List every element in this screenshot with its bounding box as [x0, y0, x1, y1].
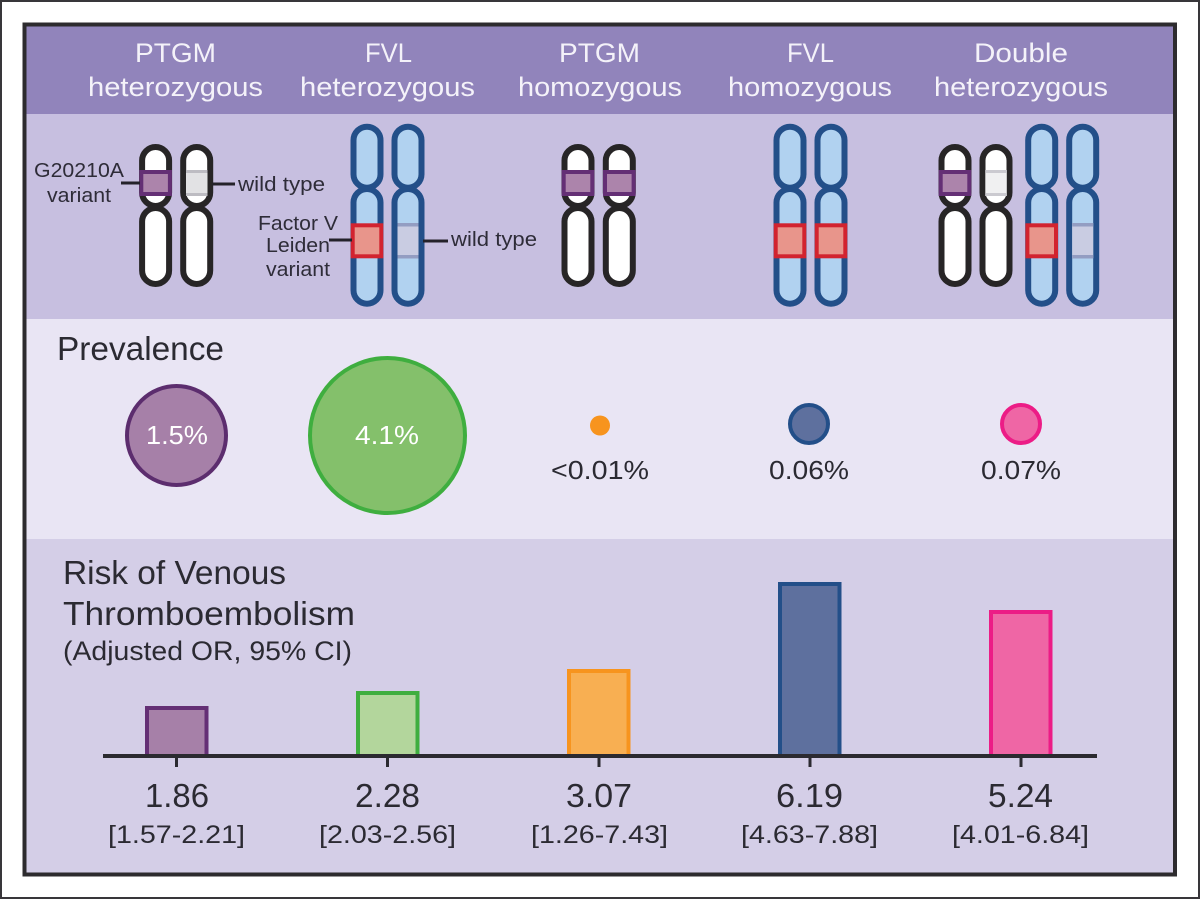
label: wild type — [212, 174, 325, 196]
heading: Prevalence: Prevalence — [57, 330, 224, 367]
value: FVL homozygous — [741, 777, 878, 849]
chromosome with Factor V Leiden variant — [353, 127, 381, 304]
bar: 6.19 — [780, 584, 840, 756]
value: FVL homozygous: [4.63-7.88] — [741, 821, 878, 849]
heading: risk of VTE: Thromboembolism — [63, 595, 355, 632]
bar: 5.24 — [991, 612, 1050, 756]
label: Factor V Leiden variant: Leiden — [266, 235, 330, 257]
value: PTGM heterozygous — [108, 777, 245, 849]
value: PTGM homozygous: [1.26-7.43] — [531, 821, 668, 849]
bubble: PTGM homozygous <0.01%: <0.01% — [551, 455, 649, 485]
header: FVL homozygous: FVL — [787, 38, 834, 68]
value: FVL homozygous: 6.19 — [776, 777, 843, 814]
bubble: FVL heterozygous 4.1%: 4.1% — [355, 420, 419, 450]
header: PTGM heterozygous: heterozygous — [88, 72, 263, 102]
chromosomes: FVL heterozygous — [258, 127, 537, 304]
value: Double heterozygous: [4.01-6.84] — [952, 821, 1089, 849]
label: G20210A variant — [34, 160, 140, 207]
panel: column headers — [25, 25, 1175, 114]
axis — [103, 756, 1097, 767]
value: PTGM heterozygous: 1.86 — [145, 777, 209, 814]
value: FVL heterozygous: 2.28 — [355, 777, 420, 814]
value: PTGM heterozygous: [1.57-2.21] — [108, 821, 245, 849]
header: FVL homozygous — [728, 38, 892, 102]
bubble: FVL homozygous 0.06%: 0.06% — [769, 455, 849, 485]
chromosomes: FVL homozygous — [776, 127, 845, 304]
heading: risk of VTE: Risk of Venous — [63, 554, 286, 591]
heading: risk of VTE — [63, 554, 355, 666]
header: PTGM heterozygous — [88, 38, 263, 102]
bar: 1.86 — [147, 708, 206, 756]
header: Double heterozygous: heterozygous — [934, 72, 1108, 102]
bubble: PTGM homozygous <0.01% — [551, 416, 649, 485]
header: PTGM homozygous: PTGM — [559, 38, 640, 68]
header: PTGM heterozygous: PTGM — [135, 38, 216, 68]
header: PTGM homozygous — [518, 38, 682, 102]
header: FVL heterozygous: FVL — [365, 38, 412, 68]
header: FVL heterozygous — [300, 38, 475, 102]
panel: prevalence — [25, 319, 1175, 539]
bar chart — [103, 584, 1097, 767]
header: Double heterozygous: Double — [974, 38, 1068, 68]
header: Double heterozygous — [934, 38, 1108, 102]
value: PTGM homozygous: 3.07 — [566, 777, 632, 814]
chromosomes: PTGM heterozygous — [34, 147, 325, 284]
chromosome wild type — [183, 147, 210, 284]
label: Factor V Leiden variant: variant — [266, 259, 330, 281]
label: wild type: wild type — [237, 174, 325, 196]
heading: risk of VTE: (Adjusted OR, 95% CI) — [63, 636, 352, 666]
header: PTGM homozygous: homozygous — [518, 72, 682, 102]
label: wild type — [423, 229, 537, 251]
bubble: Double heterozygous 0.07% — [981, 405, 1061, 485]
label: Factor V Leiden variant: Factor V — [258, 213, 339, 235]
bar: 3.07 — [569, 671, 628, 756]
chromosome with G20210A variant — [141, 147, 170, 284]
chromosomes: Double heterozygous — [941, 127, 1096, 304]
bar: 2.28 — [358, 693, 418, 756]
bubble: PTGM heterozygous 1.5% — [127, 386, 226, 485]
value: Double heterozygous — [952, 777, 1089, 849]
header: FVL heterozygous: heterozygous — [300, 72, 475, 102]
bubble: PTGM heterozygous 1.5%: 1.5% — [146, 420, 208, 450]
value: PTGM homozygous — [531, 777, 668, 849]
panel: risk of venous thromboembolism — [25, 539, 1175, 874]
label: wild type: wild type — [450, 229, 537, 251]
bubble: Double heterozygous 0.07%: 0.07% — [981, 455, 1061, 485]
value: FVL heterozygous: [2.03-2.56] — [319, 821, 456, 849]
panel: chromosomes — [25, 114, 1175, 319]
chromosomes: PTGM homozygous — [564, 147, 634, 284]
value: FVL heterozygous — [319, 777, 456, 849]
chromosome wild type — [394, 127, 422, 304]
label: G20210A variant: variant — [47, 185, 111, 207]
bubble: FVL heterozygous 4.1% — [310, 358, 465, 513]
label: G20210A variant: G20210A — [34, 160, 125, 182]
header: FVL homozygous: homozygous — [728, 72, 892, 102]
label: Factor V Leiden variant — [258, 213, 352, 281]
value: Double heterozygous: 5.24 — [988, 777, 1053, 814]
bubble: FVL homozygous 0.06% — [769, 405, 849, 485]
